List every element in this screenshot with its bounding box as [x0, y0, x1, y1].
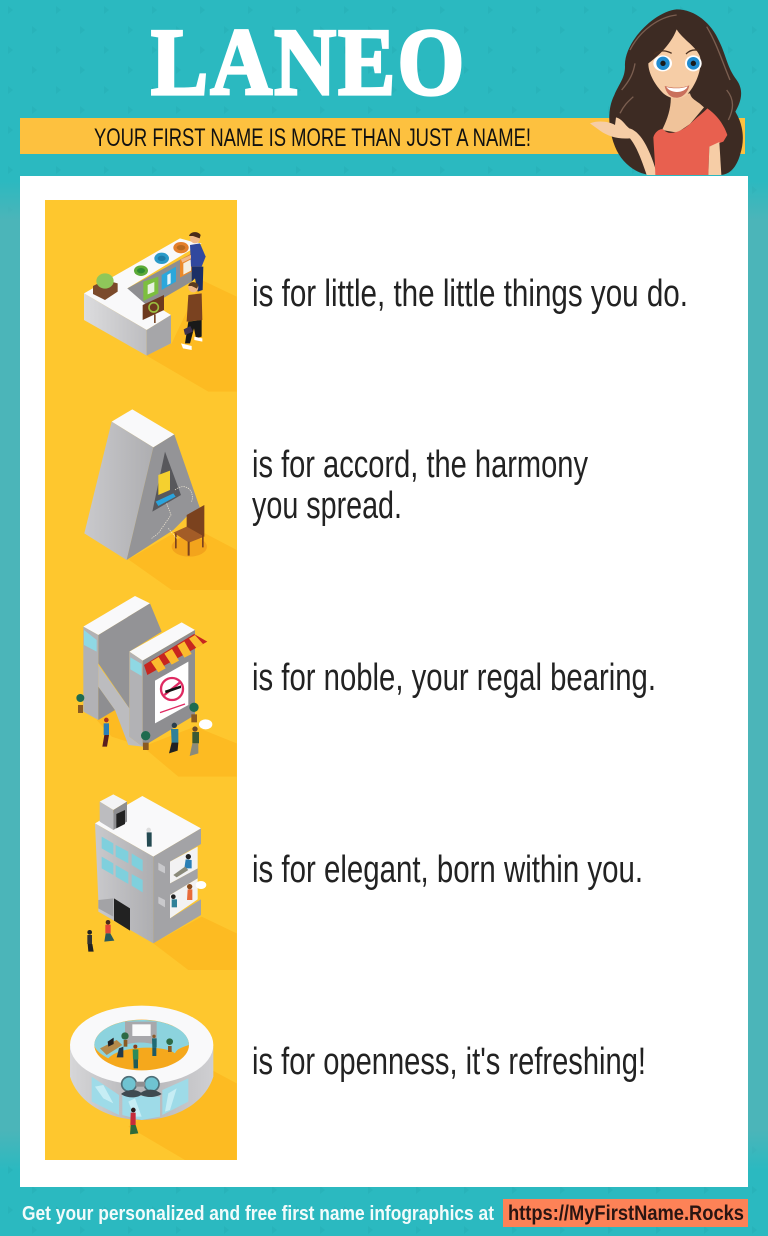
planter: [93, 273, 118, 300]
recycling bins: [134, 242, 192, 301]
letter A: desk and chair: [84, 409, 237, 590]
line A: is for accord, the harmony: [252, 444, 588, 486]
people on balconies and street: [87, 828, 206, 952]
no smoking poster: [155, 662, 188, 723]
face: [648, 29, 701, 98]
eyes: [653, 50, 702, 71]
glasses and moustache sign: [121, 1077, 162, 1097]
neck: [662, 93, 704, 133]
arm and hand: [590, 117, 657, 175]
smile: [665, 85, 689, 98]
man in brown jacket: [181, 282, 202, 350]
letter N: shop with no-smoking sign: [76, 596, 237, 777]
line E: is for elegant, born within you.: [252, 849, 643, 891]
eye chart: [132, 1024, 151, 1036]
footer text: Get your personalized and free first name infographics at: [22, 1203, 494, 1225]
line A: [252, 444, 588, 527]
entrance: [98, 898, 130, 931]
line A: you spread.: [252, 485, 402, 527]
white content panel: [20, 176, 748, 1187]
subtitle text: YOUR FIRST NAME IS MORE THAN JUST A NAME!: [94, 124, 531, 152]
glass shopfront: [92, 1077, 188, 1120]
letter O: round optician shop: [70, 1006, 237, 1160]
windows: [102, 837, 143, 892]
recycling sign: [143, 295, 164, 323]
subtitle band: [20, 118, 745, 154]
potted plants: [76, 694, 199, 750]
line N: is for noble, your regal bearing.: [252, 657, 656, 699]
wooden chair: [173, 505, 204, 556]
striped awning: [144, 634, 207, 675]
interior people and desk: [100, 1032, 173, 1068]
character: woman presenting: [590, 9, 743, 175]
letter E: office building: [87, 794, 237, 970]
name title: LANEO: [151, 9, 464, 115]
yellow illustration column: [45, 200, 237, 1160]
rooftop stairwell: [100, 794, 127, 830]
man in blue shirt: [181, 232, 206, 292]
desk screen: [156, 471, 176, 506]
dotted figure outline: [152, 487, 192, 538]
letter L: recycling station: [84, 232, 237, 392]
line O: is for openness, it's refreshing!: [252, 1041, 646, 1083]
woman at the door: [130, 1108, 138, 1134]
red shirt: [653, 108, 727, 175]
pedestrians: [102, 718, 212, 756]
